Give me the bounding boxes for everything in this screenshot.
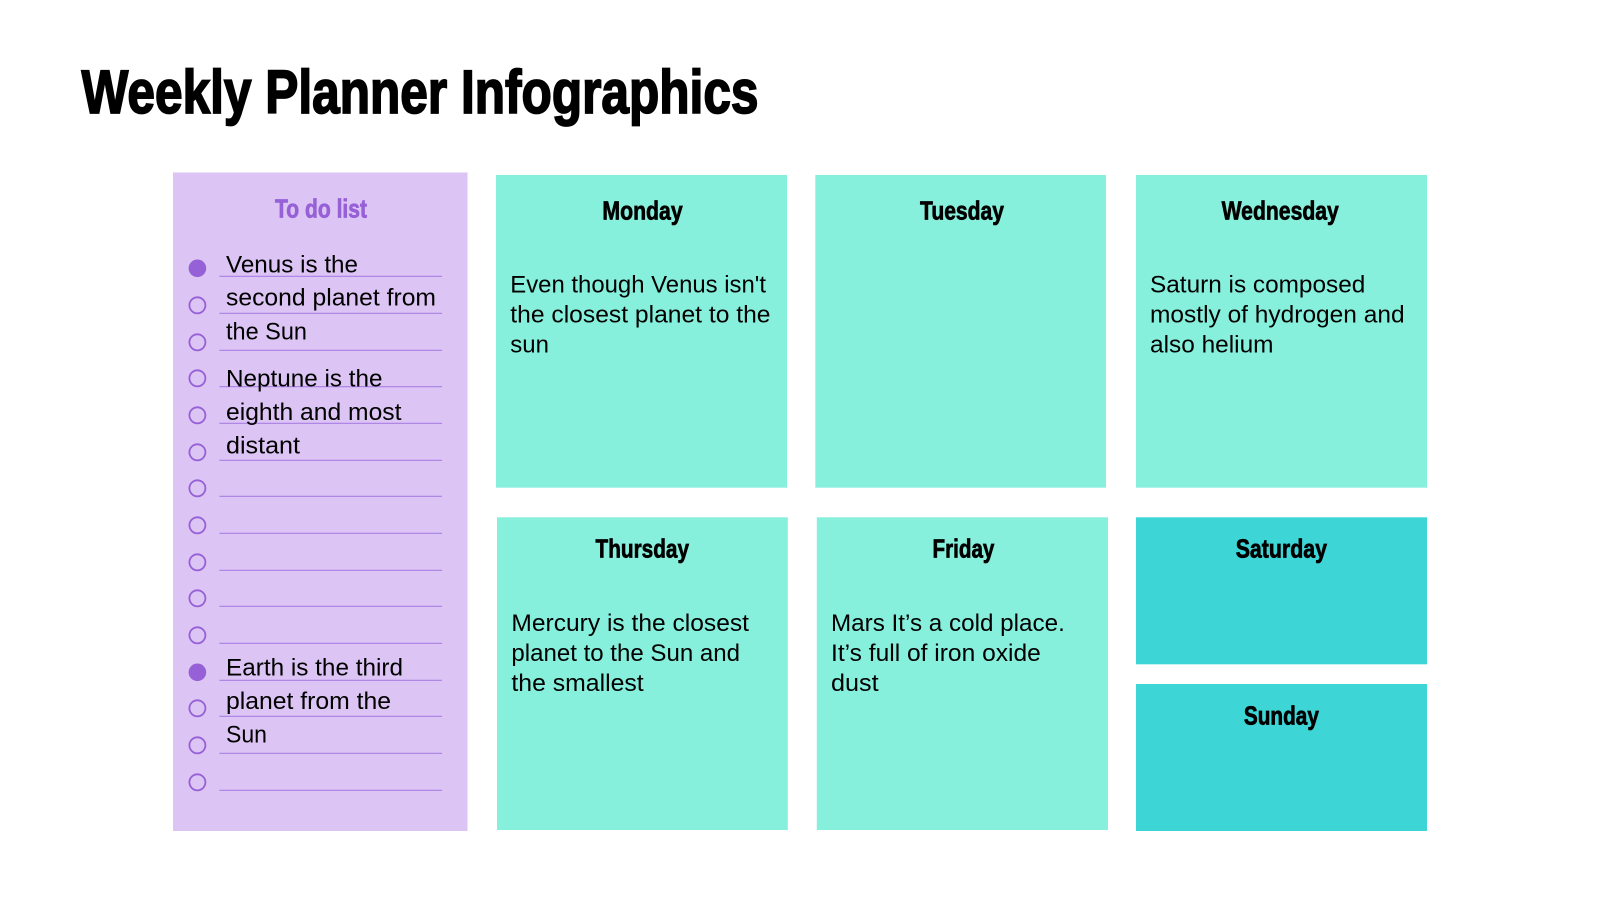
to do text: Neptune: eighth and most xyxy=(226,399,402,426)
panel: Sunday xyxy=(1136,684,1427,831)
text: Wednesday note xyxy=(1150,272,1405,359)
text: Thursday note xyxy=(511,610,749,697)
text: Monday note: Even though Venus isn't xyxy=(510,272,766,299)
text: Thursday note: the smallest xyxy=(511,670,644,697)
text: Friday note: Mars It’s a cold place. xyxy=(831,610,1065,637)
to do text: Earth: Earth is the third xyxy=(226,654,403,682)
panel: Friday xyxy=(817,517,1108,830)
text: Monday note: the closest planet to the xyxy=(510,302,770,329)
to do text: Venus: second planet from xyxy=(226,284,436,312)
panel: to do list xyxy=(173,172,468,831)
heading: Friday: Friday xyxy=(932,534,995,564)
to do text: Neptune: distant xyxy=(226,432,300,459)
text: Wednesday note: Saturn is composed xyxy=(1150,272,1365,299)
text: Monday note: sun xyxy=(510,332,549,359)
text: Friday note: It’s full of iron oxide xyxy=(831,640,1041,667)
heading: Sunday: Sunday xyxy=(1244,700,1319,730)
heading: Tuesday: Tuesday xyxy=(920,195,1004,225)
to do text: Earth: planet from the xyxy=(226,688,391,715)
heading: Saturday: Saturday xyxy=(1236,534,1327,564)
checklist rules xyxy=(219,276,442,790)
to do text: Venus xyxy=(226,252,436,345)
text: Thursday note: Mercury is the closest xyxy=(511,610,749,637)
text: Thursday note: planet to the Sun and xyxy=(511,640,740,667)
text: Monday note xyxy=(510,272,770,359)
to do text: Neptune: Neptune is the xyxy=(226,366,382,393)
panel: Monday xyxy=(496,175,787,488)
heading: Thursday: Thursday xyxy=(596,534,689,564)
to do text: Earth: Sun xyxy=(226,722,267,749)
title: Weekly Planner Infographics xyxy=(82,58,758,126)
heading: to do list: To do list xyxy=(275,194,367,224)
to do text: Venus: Venus is the xyxy=(226,252,358,279)
panel: Tuesday xyxy=(815,175,1106,488)
heading: Wednesday: Wednesday xyxy=(1222,195,1339,225)
text: Wednesday note: mostly of hydrogen and xyxy=(1150,302,1405,329)
heading: Monday: Monday xyxy=(602,195,683,225)
checklist bullets xyxy=(189,260,206,790)
to do text: Neptune xyxy=(226,366,402,459)
text: Friday note: dust xyxy=(831,670,879,697)
panel: Saturday xyxy=(1136,517,1427,664)
panel: Wednesday xyxy=(1136,175,1427,488)
text: Friday note xyxy=(831,610,1065,697)
panel: Thursday xyxy=(497,517,788,830)
to do text: Earth xyxy=(226,654,403,749)
text: Wednesday note: also helium xyxy=(1150,332,1274,359)
to do text: Venus: the Sun xyxy=(226,318,307,345)
